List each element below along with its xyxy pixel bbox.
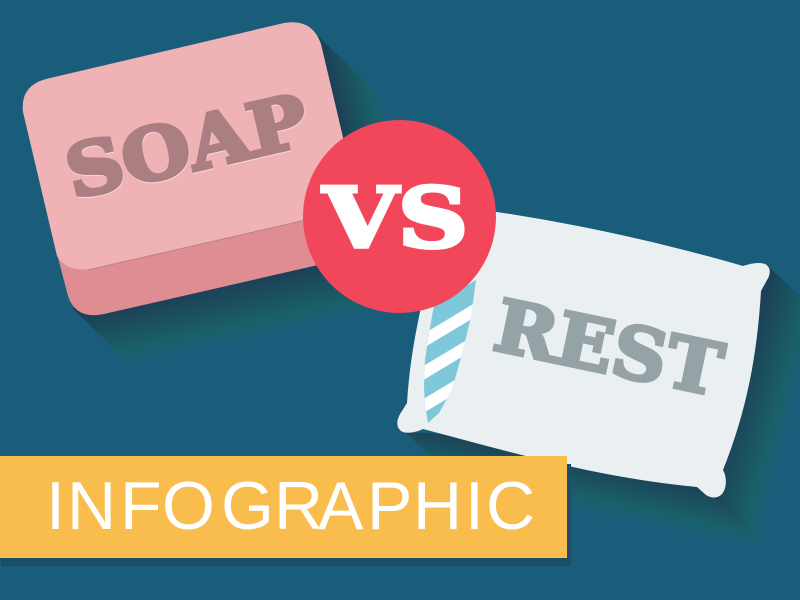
pillow [397, 208, 800, 555]
soap engraved label: SOAP [58, 78, 316, 216]
soap side face [56, 190, 340, 315]
soap long shadow [72, 36, 430, 402]
vs text: VS [322, 171, 468, 267]
banner title: INFOGRAPHIC [46, 468, 535, 544]
pillow opening stripes [424, 280, 476, 423]
vs badge [303, 120, 496, 313]
pillow body [397, 208, 770, 498]
soap top face [23, 22, 346, 269]
pillow long shadow [405, 264, 800, 555]
badge circle [303, 120, 496, 313]
soap bar [23, 22, 430, 402]
banner shadow [1, 464, 571, 566]
pillow label: REST [488, 282, 730, 413]
banner [0, 456, 571, 566]
soap engraved label: SOAP [58, 77, 316, 215]
soap edge line [88, 211, 345, 270]
banner bar [0, 456, 567, 558]
